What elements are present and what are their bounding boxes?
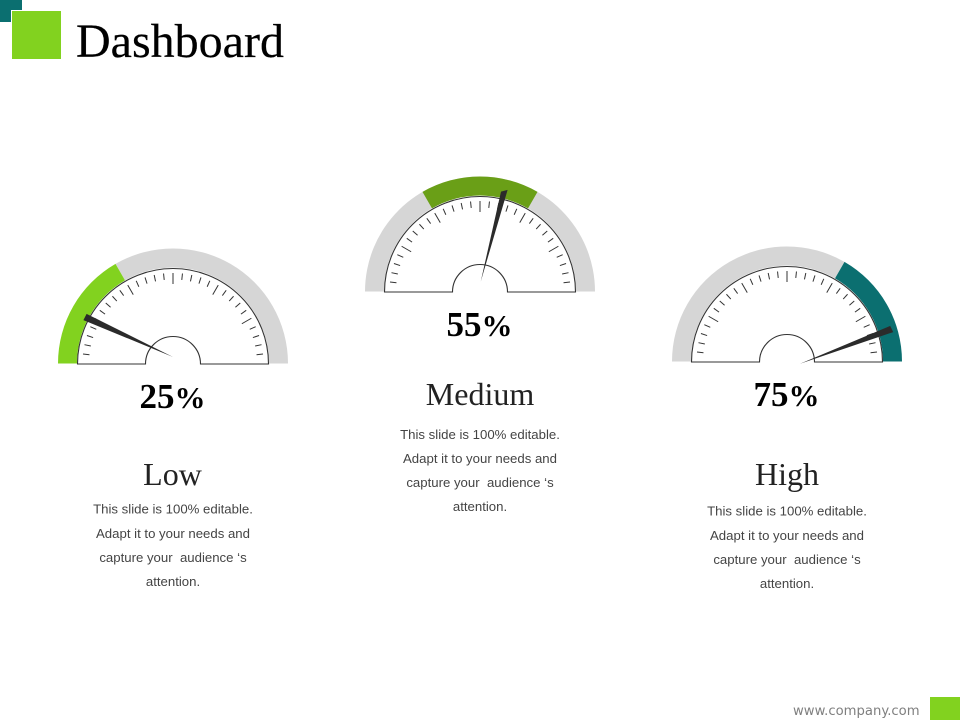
description: high bbox=[707, 504, 867, 591]
value: 25%: 25% bbox=[140, 377, 206, 416]
tick marks bbox=[83, 273, 263, 355]
value: 55%: 55% bbox=[446, 305, 512, 344]
description: medium bbox=[400, 427, 560, 514]
description: high: Adapt it to your needs and bbox=[710, 528, 864, 543]
label: medium: Medium bbox=[426, 376, 534, 412]
description: medium: Adapt it to your needs and bbox=[403, 451, 557, 466]
gauge face bbox=[78, 268, 268, 364]
title: Dashboard bbox=[76, 15, 284, 68]
gauge track: grey bbox=[672, 246, 844, 362]
logo squares bbox=[0, 0, 62, 60]
gauge segment: dark green bbox=[422, 176, 538, 208]
description: high: This slide is 100% editable. bbox=[707, 504, 867, 518]
gauge segment: teal bbox=[835, 262, 902, 362]
label: low: Low bbox=[143, 456, 202, 492]
description: low: This slide is 100% editable. bbox=[93, 502, 253, 516]
gauge track: grey bbox=[116, 248, 288, 364]
gauge: high bbox=[672, 246, 902, 364]
description: medium: attention. bbox=[453, 499, 507, 514]
needle bbox=[481, 190, 508, 282]
footer green square bbox=[930, 697, 960, 720]
description: low: Adapt it to your needs and bbox=[96, 526, 250, 541]
label: high: High bbox=[755, 456, 819, 492]
gauge segment: green bbox=[58, 264, 125, 364]
needle bbox=[800, 326, 893, 364]
description: low: capture your audience ‘s bbox=[99, 550, 247, 565]
footer url: www.company.com bbox=[793, 704, 920, 719]
description: medium: This slide is 100% editable. bbox=[400, 427, 560, 442]
description: high: capture your audience ‘s bbox=[713, 552, 861, 567]
tick marks bbox=[697, 271, 877, 353]
description: high: attention. bbox=[760, 576, 814, 591]
gauge face bbox=[384, 196, 576, 292]
description: low bbox=[93, 502, 253, 589]
description: medium: capture your audience ‘s bbox=[406, 475, 554, 490]
gauge face bbox=[692, 266, 882, 362]
tick marks bbox=[390, 201, 570, 283]
gauge: low bbox=[58, 248, 288, 364]
value: 75%: 75% bbox=[754, 375, 820, 414]
gauge: medium bbox=[365, 176, 595, 292]
description: low: attention. bbox=[146, 574, 200, 589]
needle bbox=[83, 314, 173, 357]
gauge track: grey bbox=[365, 177, 595, 292]
